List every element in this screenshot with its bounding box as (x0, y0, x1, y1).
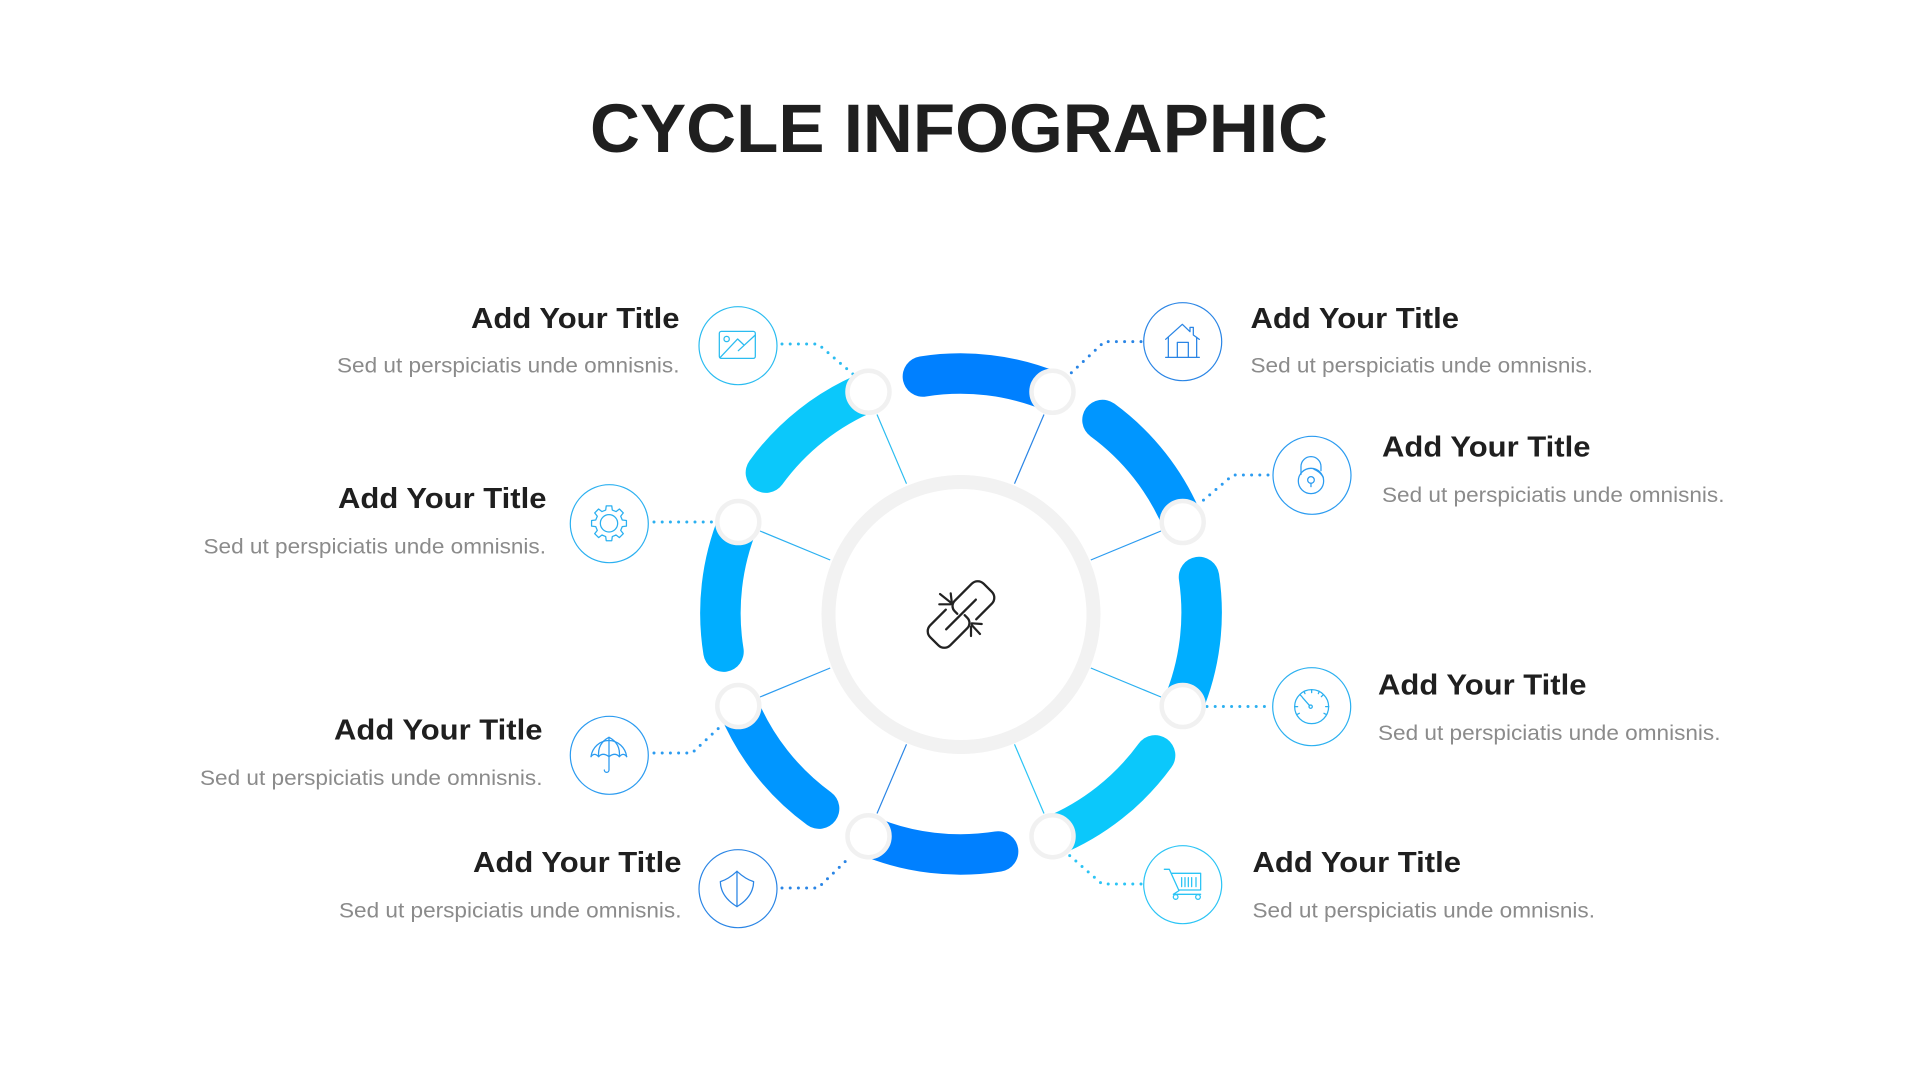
text block: bottom right: Add Your Title (1252, 847, 1461, 879)
text block: lower right: Add Your Title (1378, 670, 1586, 702)
text block: top right: Add Your Title (1250, 303, 1459, 335)
text block: upper left: Sed ut perspiciatis unde omnisnis. (204, 534, 546, 558)
segment: lower right (1052, 755, 1155, 836)
text block: top right: Sed ut perspiciatis unde omnisnis. (1250, 354, 1593, 378)
text block: lower left: Sed ut perspiciatis unde omnisnis. (200, 766, 542, 790)
cycle ring segments (720, 374, 1202, 854)
icon: house (1144, 303, 1222, 381)
icon: umbrella (570, 716, 648, 794)
segment: top (923, 374, 1052, 392)
icon: padlock (1273, 436, 1351, 514)
text block: lower left: Add Your Title (334, 714, 542, 746)
text block: top left: Sed ut perspiciatis unde omnisnis. (337, 354, 680, 378)
segment: upper right (1102, 420, 1183, 522)
segment: upper left (766, 392, 868, 473)
text block: upper left (204, 483, 546, 558)
segment: right (1183, 577, 1202, 706)
icon: broken chain link (924, 578, 998, 651)
text block: top left: Add Your Title (471, 303, 680, 335)
text block: bottom left (339, 847, 682, 922)
icon: image (699, 307, 777, 385)
segment: lower left (738, 706, 819, 809)
segment: left (720, 522, 738, 652)
text block: upper right: Sed ut perspiciatis unde omnisnis. (1382, 483, 1724, 507)
text block: upper left: Add Your Title (338, 483, 546, 515)
text block: upper right (1382, 432, 1724, 507)
centre circle (828, 482, 1094, 747)
cycle nodes (717, 371, 1204, 857)
text block: bottom left: Sed ut perspiciatis unde omnisnis. (339, 898, 682, 922)
title: CYCLE INFOGRAPHIC (590, 90, 1328, 167)
text block: upper right: Add Your Title (1382, 432, 1590, 464)
text block: bottom right (1252, 847, 1595, 922)
segment: bottom (868, 836, 998, 854)
icon: shield (699, 850, 777, 928)
text block: lower left (200, 714, 542, 790)
icon: gear (570, 485, 648, 563)
spokes from centre to nodes (760, 414, 1161, 814)
text block: lower right (1378, 670, 1720, 745)
icon: shopping cart (1144, 846, 1222, 924)
text block: bottom right: Sed ut perspiciatis unde omnisnis. (1252, 898, 1595, 922)
text block: top left (337, 303, 680, 378)
dotted connectors (654, 342, 1272, 888)
icon: gauge (1273, 668, 1351, 746)
text block: bottom left: Add Your Title (473, 847, 682, 879)
text block: lower right: Sed ut perspiciatis unde omnisnis. (1378, 721, 1720, 745)
text block: top right (1250, 303, 1593, 378)
